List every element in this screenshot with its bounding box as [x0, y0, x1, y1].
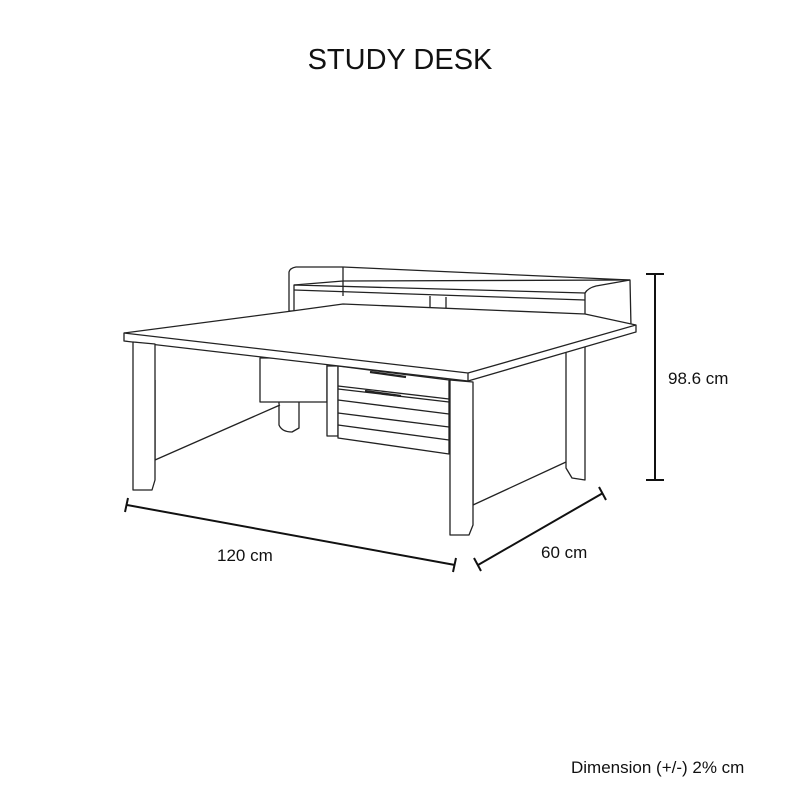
dimension lines [125, 274, 664, 572]
front legs [133, 342, 473, 535]
tabletop [124, 304, 636, 381]
hanging drawer [260, 358, 327, 402]
label: height: 98.6 cm [668, 369, 728, 388]
back legs [279, 345, 585, 480]
drawer unit [327, 366, 449, 454]
label: width: 120 cm [217, 546, 273, 565]
label: depth: 60 cm [541, 543, 587, 562]
side panels [155, 380, 566, 505]
footnote: Dimension (+/-) 2% cm [571, 758, 744, 777]
title: STUDY DESK [308, 44, 492, 76]
hutch [289, 267, 631, 336]
